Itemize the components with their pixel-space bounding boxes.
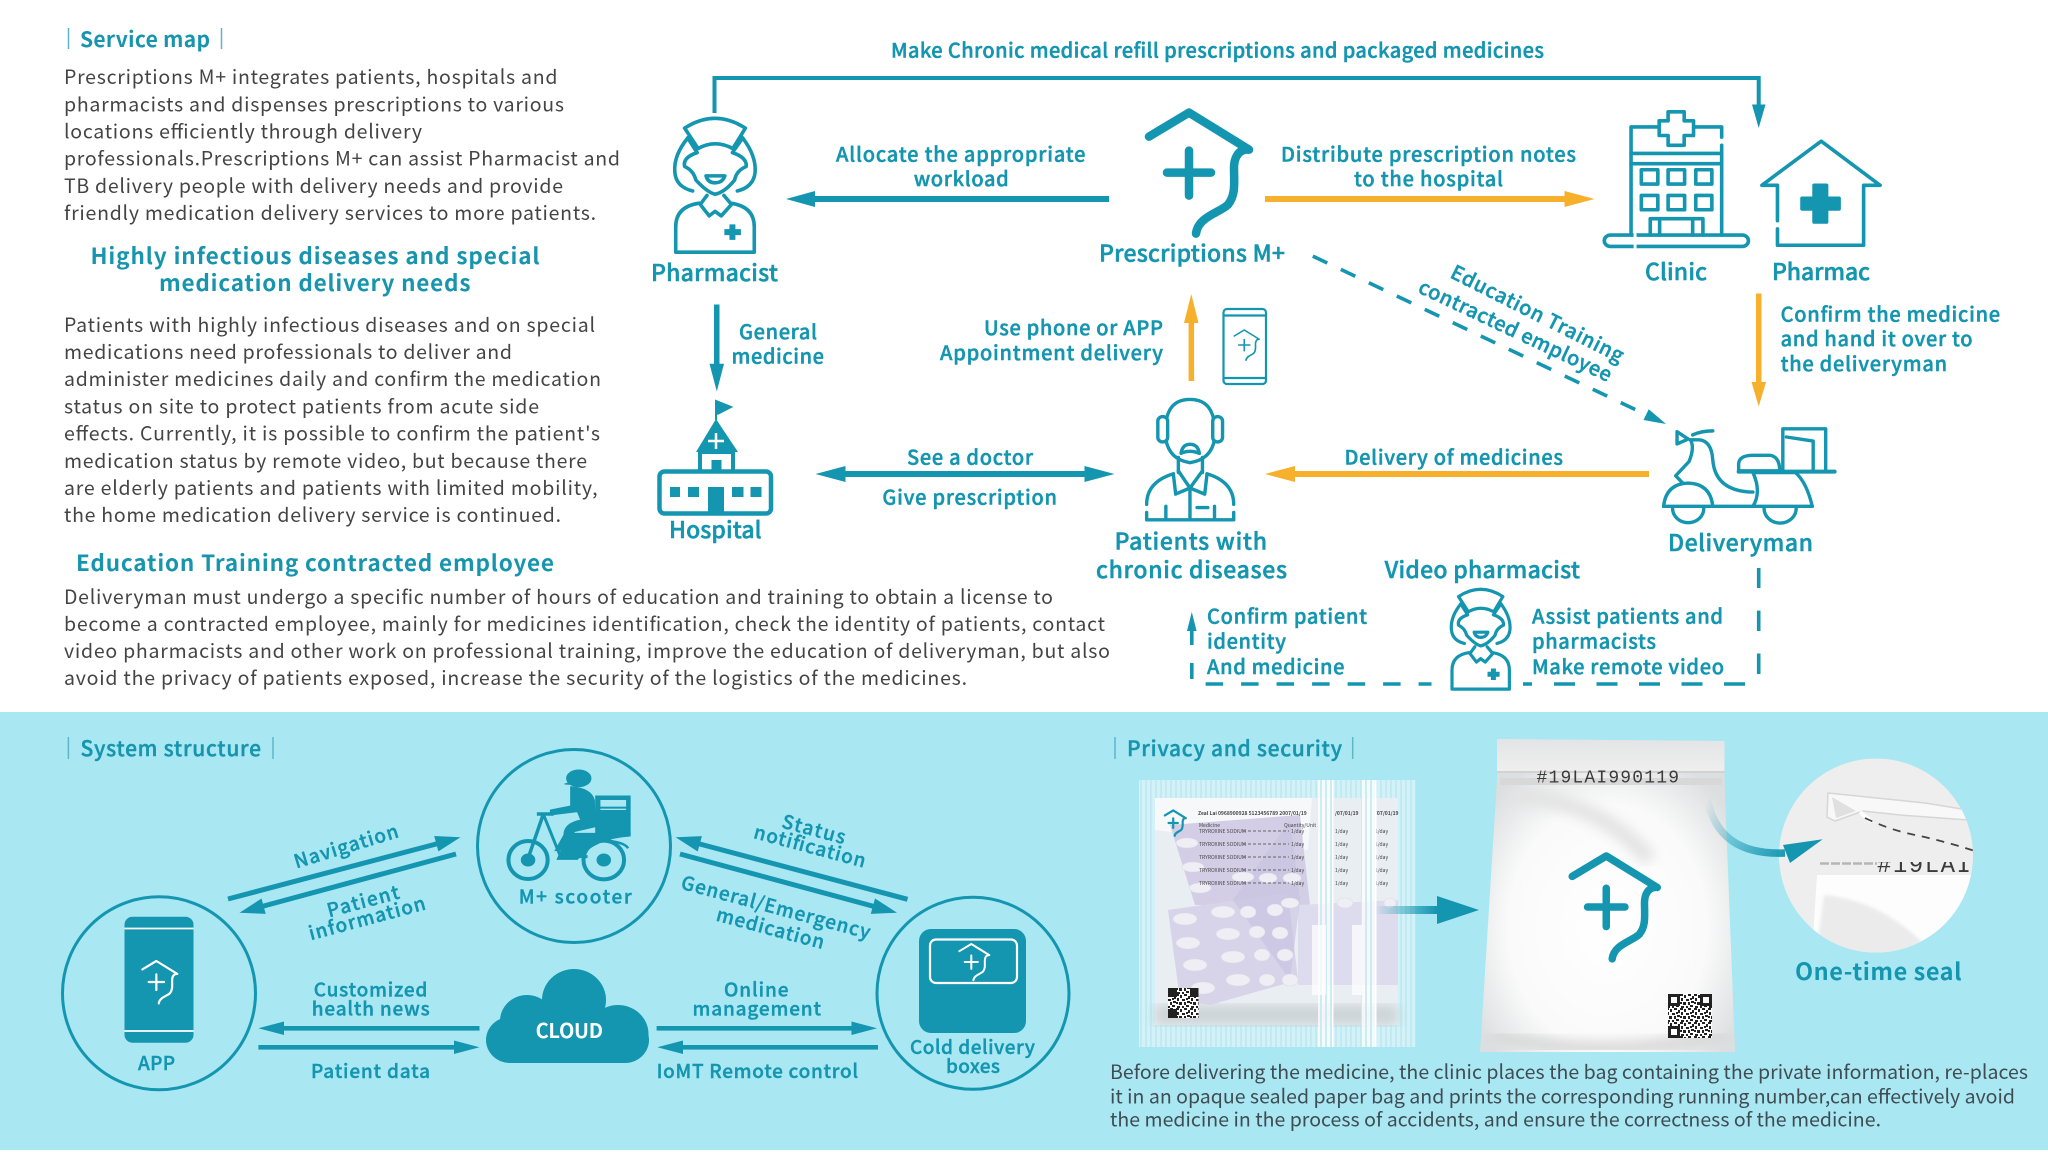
label: deliveryman: Deliveryman: [1668, 524, 1813, 558]
label: refill prescriptions: Make Chronic medical refill prescriptions and packaged medicines: [891, 34, 1544, 64]
arrow: refill prescriptions: [714, 78, 1766, 128]
label: confirm patient: [1207, 601, 1367, 680]
text: label on bag: 1/day: [1335, 867, 1348, 874]
text: label on bag: /07/01/19: [1375, 810, 1399, 817]
text: label on bag: 1/day: [1335, 854, 1348, 861]
text block: intro: friendly medication delivery services to more patients.: [64, 197, 596, 226]
label: cold delivery boxes: boxes: [946, 1052, 1000, 1079]
arrow: navigation: [228, 836, 460, 899]
text block: intro: TB delivery people with delivery needs and provide: [64, 170, 563, 199]
text: label on bag: 1/day: [1291, 854, 1304, 861]
text block: intro: pharmacists and dispenses prescriptions to various: [64, 88, 564, 117]
label: hand over: [1781, 298, 2000, 377]
label: confirm patient: And medicine: [1207, 651, 1344, 680]
text block: infectious diseases: administer medicines daily and confirm the medication: [64, 363, 601, 392]
text: label on bag: TRYROXINE SODIUM: [1199, 828, 1246, 835]
arrow: bag to seal close-up: [1707, 798, 1823, 863]
text block: education training: video pharmacists and other work on professional training, improve the education of deliveryman, but also: [64, 635, 1110, 664]
text: label on bag: 1/day: [1375, 880, 1388, 887]
arrow: education training dashed: [1307, 254, 1666, 424]
label: give prescription: Give prescription: [882, 482, 1057, 510]
label: status notification: Status: [779, 807, 849, 850]
label: appointment: Appointment delivery: [940, 337, 1163, 366]
text block: privacy description: the medicine in the process of accidents, and ensure the correctness of the medicine.: [1110, 1104, 1881, 1133]
label: running number: #19LAI990119: [1536, 769, 1679, 789]
text: label on bag: 1/day: [1291, 828, 1304, 835]
text: label on bag: Quantity/Unit: [1284, 822, 1316, 829]
label: video pharmacist: Video pharmacist: [1384, 551, 1580, 585]
label: delivery of medicines: Delivery of medicines: [1344, 442, 1563, 470]
text block: infectious diseases: Patients with highly infectious diseases and on special: [64, 309, 595, 338]
icon: phone with logo: [1224, 309, 1266, 384]
qr code: [1668, 994, 1712, 1038]
label: patient information: Patient: [324, 878, 403, 923]
text block: infectious diseases: effects. Currently, it is possible to confirm the patient's: [64, 418, 600, 447]
text: label on bag: 1/day: [1335, 880, 1348, 887]
label: IoMT remote control: IoMT Remote control: [657, 1057, 858, 1084]
text: label on bag: 1/day: [1291, 880, 1304, 887]
arrow: general medicine: [710, 304, 724, 392]
panel: privacy and security: [1110, 733, 2028, 1133]
text: label on bag: 1/day: [1291, 867, 1304, 874]
text: label on bag: 1/day: [1375, 841, 1388, 848]
label: allocate workload: Allocate the appropriate: [836, 138, 1086, 168]
text block: intro: Prescriptions M+ integrates patients, hospitals and: [64, 61, 558, 90]
icon: pharmacy house: [1762, 141, 1880, 245]
icon: cold box: [919, 929, 1026, 1033]
label: clinic: Clinic: [1645, 253, 1707, 287]
text block: privacy description: Before delivering the medicine, the clinic places the bag containing the private information, re-places: [1110, 1056, 2028, 1085]
label: hand over: the deliveryman: [1781, 348, 1947, 377]
label: general emergency medication: General/Emergency: [678, 868, 874, 945]
panel: system and privacy band: [0, 712, 2048, 1150]
label: customized health news: health news: [312, 995, 430, 1022]
arrow: patient information: [240, 854, 456, 914]
arrow: distribute notes: [1265, 191, 1594, 207]
text: label on bag: 1/day: [1375, 867, 1388, 874]
label: customized health news: Customized: [314, 976, 427, 1003]
text block: privacy description: it in an opaque sealed paper bag and prints the corresponding running number,can effectively avoid: [1110, 1080, 2015, 1109]
label: patients: Patients with: [1115, 522, 1267, 556]
arrow: status notification: [676, 836, 908, 899]
label: assist patients: Make remote video: [1532, 651, 1724, 680]
text block: intro: locations efficiently through delivery: [64, 116, 422, 144]
text block: intro: professionals.Prescriptions M+ can assist Pharmacist and: [64, 143, 620, 172]
heading: service map: Service map: [80, 24, 210, 54]
text block: infectious diseases: medication status by remote video, but because there: [64, 445, 587, 474]
heading: system structure: System structure: [80, 733, 261, 763]
text: label on bag: TRYROXINE SODIUM: [1199, 867, 1246, 874]
arrow: bag to sealed bag: [1375, 896, 1479, 924]
icon: deliveryman scooter: [1664, 429, 1835, 523]
arrow: online management: [657, 1022, 877, 1035]
icon: phone app: [124, 917, 194, 1043]
image: sealed opaque bag: [1480, 739, 1735, 1052]
label: pharmacist: Pharmacist: [651, 254, 778, 288]
icon: Prescriptions M+ logo: [1149, 113, 1249, 234]
label: distribute notes: to the hospital: [1354, 163, 1503, 192]
text block: education training: avoid the privacy of patients exposed, increase the security of the logistics of the medicines.: [64, 662, 967, 691]
label: customized health news: [312, 976, 430, 1022]
label: app: APP: [138, 1049, 175, 1076]
image: one-time seal close-up: [1779, 758, 1975, 960]
arrow: IoMT remote control: [657, 1040, 878, 1054]
arrow: medication: [680, 854, 897, 914]
text block: privacy description: [1110, 1056, 2028, 1133]
label: general emergency medication: medication: [714, 900, 828, 955]
label: distribute notes: Distribute prescription notes: [1281, 138, 1576, 168]
text block: infectious diseases: status on site to protect patients from acute side: [64, 390, 539, 419]
arrow: see a doctor / give prescription: [816, 466, 1114, 482]
icon: patient: [1147, 399, 1234, 520]
heading: infectious diseases: [90, 239, 540, 298]
label: hand over: and hand it over to: [1781, 323, 1973, 352]
heading: infectious diseases: medication delivery needs: [159, 266, 470, 298]
label: allocate workload: workload: [914, 163, 1009, 192]
label: assist patients: Assist patients and: [1532, 601, 1723, 630]
label: appointment: Use phone or APP: [984, 312, 1163, 341]
label: navigation: Navigation: [290, 817, 401, 874]
label: patient information: information: [305, 889, 428, 946]
text: label on bag: TRYROXINE SODIUM: [1199, 841, 1246, 848]
text block: education training: become a contracted employee, mainly for medicines identification, check the identity of patients, contact: [64, 608, 1106, 637]
text: label on bag: 1/day: [1375, 854, 1388, 861]
label: education training diagonal: Education Training: [1446, 256, 1630, 369]
node: app: [62, 897, 256, 1090]
label: appointment: [940, 312, 1163, 366]
label: general medicine: [732, 316, 824, 370]
text: label on bag: /07/01/19: [1335, 810, 1359, 817]
label: general medicine: General: [739, 316, 817, 345]
text block: infectious diseases: medications need professionals to deliver and: [64, 336, 512, 365]
text: label on bag: 1/day: [1335, 828, 1348, 835]
icon: video pharmacist: [1451, 589, 1510, 689]
label: cloud: CLOUD: [536, 1015, 603, 1044]
arrow: hand over: [1752, 294, 1766, 406]
arrow: patient data: [258, 1040, 480, 1054]
text block: infectious diseases: the home medication delivery service is continued.: [64, 499, 561, 528]
label: patient data: Patient data: [311, 1057, 430, 1084]
arrow: customized health news: [258, 1022, 480, 1035]
label: online management: management: [692, 995, 821, 1022]
label: assist patients: [1532, 601, 1724, 680]
label: Prescriptions M+: Prescriptions M+: [1099, 234, 1285, 268]
text: label on bag: Zeal Lai 0968900928 5123456789 2007/01/19: [1198, 810, 1307, 817]
label: M+ scooter: M+ scooter: [519, 882, 632, 909]
text block: education training: Deliveryman must undergo a specific number of hours of education and training to obtain a license to: [64, 581, 1053, 610]
panel: system structure: [62, 733, 1069, 1090]
text: label on bag: TRYROXINE SODIUM: [1199, 854, 1246, 861]
label: patients: chronic diseases: [1096, 551, 1287, 585]
label: seal number: #19LAI: [1877, 853, 1972, 880]
text: label on bag: [1198, 810, 1399, 887]
icon: logo on bag: [1572, 856, 1657, 959]
label: patients: [1096, 522, 1287, 585]
label: hospital: Hospital: [669, 511, 762, 545]
icon: pharmacist: [675, 118, 755, 252]
arrow: allocate workload: [786, 191, 1109, 207]
heading: education training: Education Training contracted employee: [76, 546, 554, 578]
text: label on bag: TRYROXINE SODIUM: [1199, 880, 1246, 887]
blister sheet: front: [1168, 893, 1298, 1005]
text block: infectious diseases: [64, 309, 601, 528]
text block: education training: [64, 581, 1110, 691]
pills: [1173, 838, 1396, 994]
label: see a doctor: See a doctor: [907, 442, 1034, 470]
text: label on bag: Medicine: [1199, 822, 1220, 829]
icon: scooter rider: [508, 770, 630, 879]
label: cold delivery boxes: Cold delivery: [910, 1033, 1036, 1060]
label: one-time seal: One-time seal: [1795, 953, 1962, 987]
image: transparent medicine bags: [1139, 780, 1416, 1047]
label: allocate workload: [836, 138, 1086, 192]
label: pharmac: Pharmac: [1772, 253, 1870, 287]
label: cold delivery boxes: [910, 1033, 1036, 1079]
panel: service map diagram: [651, 34, 2000, 689]
label: confirm patient: Confirm patient: [1207, 601, 1367, 630]
arrow: video route dashed: [1187, 568, 1759, 684]
arrow: delivery of medicines: [1265, 466, 1649, 482]
icon: hospital: [660, 401, 771, 514]
label: status notification: notification: [751, 818, 869, 873]
label: education training diagonal: contracted employee: [1414, 271, 1618, 388]
heading: privacy and security: Privacy and security: [1127, 733, 1343, 763]
heading: infectious diseases: Highly infectious diseases and special: [90, 239, 540, 271]
label: assist patients: pharmacists: [1532, 626, 1656, 655]
text: label on bag: 1/day: [1335, 841, 1348, 848]
label: hand over: Confirm the medicine: [1781, 298, 2000, 328]
label: confirm patient: identity: [1207, 626, 1286, 655]
text: label on bag: 1/day: [1291, 841, 1304, 848]
label: distribute notes: [1281, 138, 1576, 192]
label: general medicine: medicine: [732, 341, 824, 370]
icon: cloud: [486, 969, 649, 1063]
text: label on bag: 1/day: [1375, 828, 1388, 835]
label: online management: [692, 976, 821, 1022]
text block: infectious diseases: are elderly patients and patients with limited mobility,: [64, 472, 598, 501]
node: cold delivery boxes: [877, 897, 1069, 1089]
arrow: appointment: [1184, 294, 1198, 381]
panel: left text column: [64, 24, 1110, 691]
blister sheet: back: [1170, 815, 1310, 905]
text block: intro: [64, 61, 620, 226]
label: online management: Online: [724, 976, 788, 1003]
icon: clinic: [1604, 112, 1748, 247]
node: M+ scooter: [478, 750, 670, 942]
